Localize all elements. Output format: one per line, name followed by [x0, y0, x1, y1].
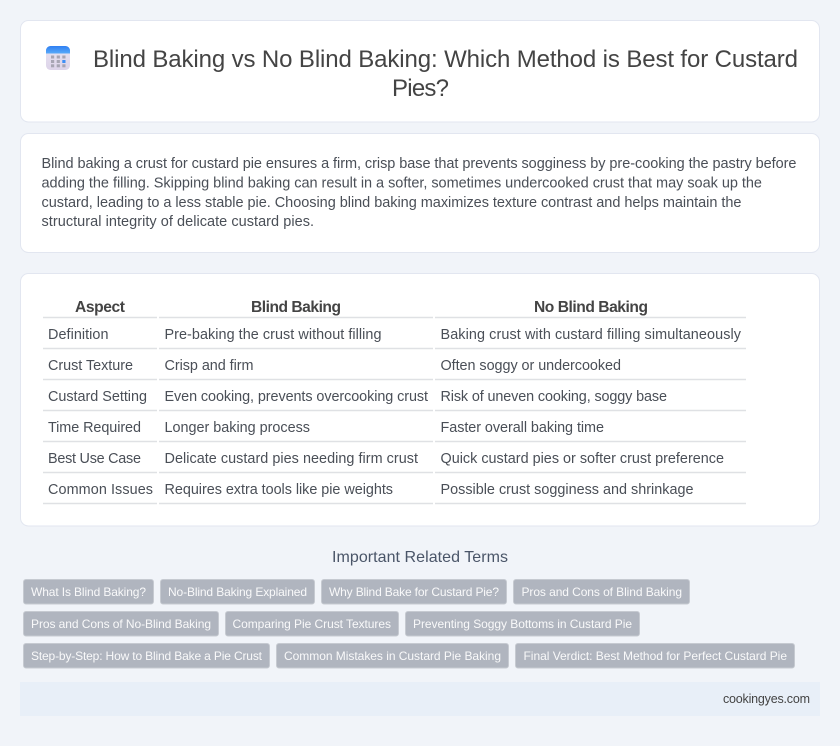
table row: custard setting: Risk of uneven cooking, soggy base — [440, 389, 667, 405]
title: Blind Baking vs No Blind Baking: Which Method is Best for Custard — [93, 46, 798, 73]
tag: Preventing Soggy Bottoms in Custard Pie — [413, 617, 632, 631]
table header: Blind Baking — [251, 299, 341, 316]
tag — [24, 580, 154, 604]
title — [93, 46, 798, 102]
table row: best use case: Delicate custard pies needing firm crust — [164, 451, 418, 467]
table row: time required: Longer baking process — [164, 420, 310, 436]
panel: comparison table — [20, 274, 820, 526]
text block: introduction — [42, 156, 796, 230]
tag: Pros and Cons of Blind Baking — [522, 585, 682, 599]
tag: Comparing Pie Crust Textures — [232, 617, 391, 631]
table row: best use case — [48, 451, 724, 467]
table row: definition: Definition — [48, 327, 108, 343]
text block: introduction: adding the filling. Skipping blind baking can result in a softer, sometimes undercooked crust that may soak up the — [42, 176, 762, 192]
table row: custard setting: Even cooking, prevents overcooking crust — [164, 389, 428, 405]
table row: custard setting: Custard Setting — [48, 389, 147, 405]
icon: calendar — [46, 46, 70, 70]
tag — [226, 612, 398, 636]
tag: Step-by-Step: How to Blind Bake a Pie Crust — [31, 649, 263, 663]
footer bar — [20, 682, 820, 716]
tag — [24, 644, 270, 668]
tag: Why Blind Bake for Custard Pie? — [329, 585, 499, 599]
table row: common issues: Common Issues — [48, 482, 153, 498]
table row: crust texture: Crisp and firm — [164, 358, 254, 374]
tag: Common Mistakes in Custard Pie Baking — [284, 649, 501, 663]
tag: Pros and Cons of No-Blind Baking — [31, 617, 211, 631]
table row: best use case: Quick custard pies or softer crust preference — [440, 451, 724, 467]
text block: introduction: custard, leading to a less stable pie. Choosing blind baking maximizes texture contrast and helps maintain the — [42, 195, 742, 211]
tag — [322, 580, 506, 604]
title: Pies? — [392, 75, 449, 102]
table row: common issues: Possible crust sogginess and shrinkage — [440, 482, 694, 498]
text block: introduction: Blind baking a crust for custard pie ensures a firm, crisp base that prevents sogginess by pre-cooking the pastry before — [42, 156, 796, 172]
table row: crust texture: Crust Texture — [48, 358, 133, 374]
table row: time required: Time Required — [48, 420, 141, 436]
table row: best use case: Best Use Case — [48, 451, 141, 467]
table row: definition: Baking crust with custard filling simultaneously — [440, 327, 742, 343]
footer source text: cookingyes.com — [723, 692, 810, 706]
table header — [75, 299, 648, 316]
table row: common issues — [48, 482, 694, 498]
table row: time required — [48, 420, 604, 436]
table row: time required: Faster overall baking time — [440, 420, 604, 436]
tag — [514, 580, 690, 604]
heading: related terms: Important Related Terms — [332, 549, 508, 566]
table row: crust texture — [48, 358, 621, 374]
tag — [276, 644, 508, 668]
table row: common issues: Requires extra tools like pie weights — [164, 482, 393, 498]
panel: title header — [20, 20, 820, 122]
tag: No-Blind Baking Explained — [168, 585, 307, 599]
table row: crust texture: Often soggy or undercooked — [440, 358, 621, 374]
tag — [24, 612, 218, 636]
table header: Aspect — [75, 299, 125, 316]
panel: introduction paragraph — [20, 134, 820, 252]
tag — [516, 644, 794, 668]
tag group: related terms — [24, 580, 794, 668]
table row: definition — [48, 327, 742, 343]
tag: What Is Blind Baking? — [31, 585, 146, 599]
tag — [160, 580, 314, 604]
table row: definition: Pre-baking the crust without filling — [164, 327, 382, 343]
table header: No Blind Baking — [534, 299, 648, 316]
tag — [406, 612, 640, 636]
tag: Final Verdict: Best Method for Perfect Custard Pie — [524, 649, 787, 663]
table row: custard setting — [48, 389, 667, 405]
text block: introduction: structural integrity of delicate custard pies. — [42, 214, 314, 230]
